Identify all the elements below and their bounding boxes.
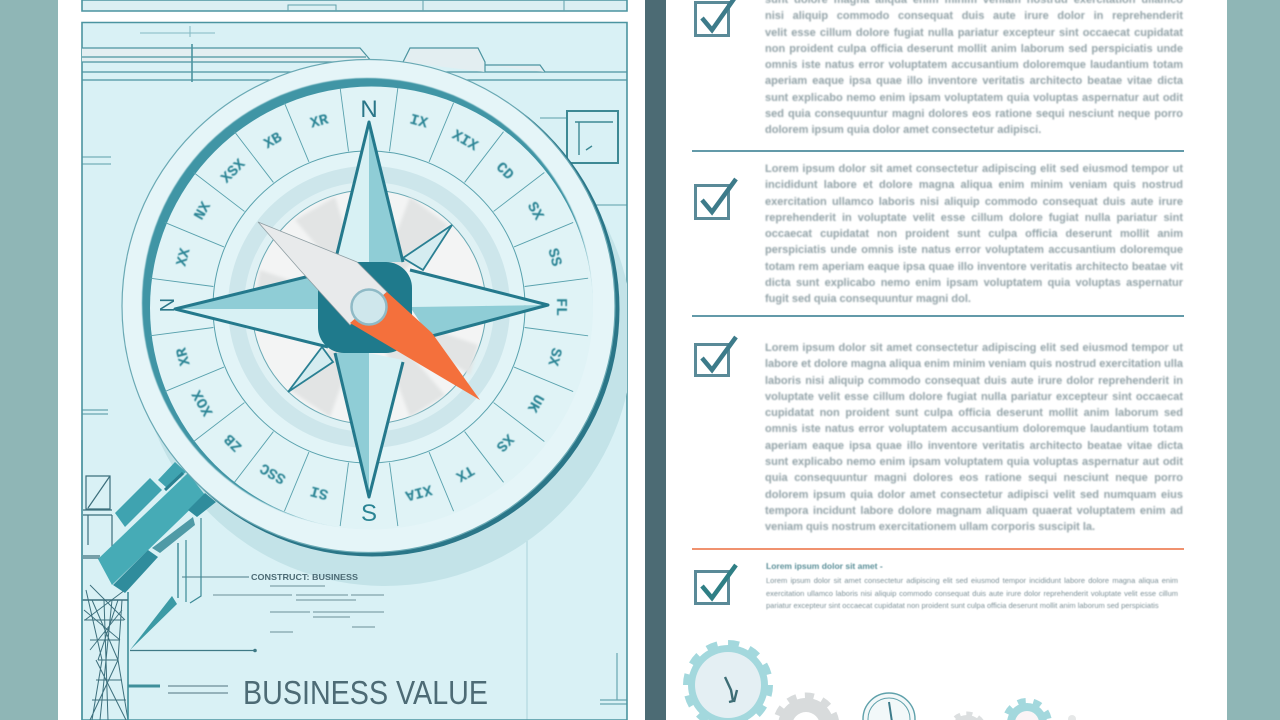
- dial sector lines: [150, 88, 588, 526]
- dial graduations: SSC: [257, 459, 289, 487]
- dial graduations: XSX: [218, 156, 249, 187]
- compass body: [122, 60, 620, 556]
- dial graduations: SS: [543, 247, 565, 268]
- cardinal letter west: N: [157, 298, 179, 312]
- dark centre spine: [645, 0, 666, 720]
- item 3: text: laboris nisi aliquip commodo consequat duis aute irure dolor reprehenderit in: [765, 375, 1183, 387]
- dial face: [150, 86, 593, 530]
- item 1: text: dolorem ipsum quia dolor amet consectetur adipisci.: [765, 124, 1041, 136]
- panel: right sheet: [666, 0, 1227, 720]
- dial graduations: XX: [173, 247, 195, 268]
- illustration: compass blueprint: [81, 0, 628, 720]
- item 1: text: [764, 0, 1184, 136]
- compass drop shadow: [155, 220, 627, 586]
- dial graduations: XIX: [449, 127, 481, 155]
- small compass dial: [863, 693, 915, 720]
- blueprint background lines: [82, 26, 627, 720]
- divider rule 2: [692, 315, 1184, 317]
- item 3: text: veniam quis nostrum exercitationem ullam corporis suscipit la.: [765, 521, 1095, 533]
- item 4: sub-heading: Lorem ipsum dolor sit amet -: [766, 561, 883, 571]
- item 3: text: aperiam eaque ipsa quae illo inventore veritatis architecto beatae vitae dicta: [765, 440, 1183, 452]
- dial graduations: XB: [261, 129, 285, 153]
- callout label: blueprint note: [130, 518, 384, 652]
- item 1: checkbox: [694, 0, 736, 37]
- white bezel: [122, 60, 615, 552]
- gear: large teal: [686, 644, 770, 720]
- item 2: checkbox: [694, 178, 738, 220]
- dial graduations: XR: [173, 346, 195, 367]
- dial graduations: ZB: [221, 430, 246, 455]
- item 3: text: [764, 342, 1184, 534]
- blueprint panel: [82, 22, 627, 720]
- dial graduations: SI: [309, 481, 330, 503]
- dial graduations: UK: [523, 391, 547, 415]
- item 3: text: voluptate velit esse cillum dolore fugiat nulla pariatur excepteur sint occaecat: [765, 391, 1183, 403]
- needle pivot: [352, 290, 386, 324]
- callout label: blueprint note: CONSTRUCT: BUSINESS: [251, 572, 358, 582]
- gear: small teal: [1005, 701, 1049, 720]
- needle white half: [258, 222, 387, 325]
- dial graduations: SX: [523, 199, 547, 223]
- item 4: checkbox: [694, 564, 738, 605]
- divider rule orange: [692, 548, 1184, 550]
- item 1: text: non proident culpa officia deserunt mollit anim laborum sed perspiciatis unde: [765, 43, 1183, 55]
- gear: small grey: [949, 714, 985, 720]
- compass star secondary points: [288, 225, 452, 392]
- outer dark rim: [124, 62, 620, 556]
- top blueprint strip: [82, 0, 627, 11]
- item 2: text: totam rem aperiam eaque ipsa quae illo inventore veritatis architecto beatae vit: [765, 261, 1183, 273]
- cardinal letter south: S: [361, 500, 377, 527]
- blueprint box top right: [567, 111, 618, 163]
- item 2: text: Lorem ipsum dolor sit amet consectetur adipiscing elit sed eiusmod tempor ut: [765, 163, 1183, 175]
- star centre hub: [318, 262, 412, 353]
- dial graduations: CD: [492, 159, 517, 184]
- item 3: text: Lorem ipsum dolor sit amet consectetur adipiscing elit sed eiusmod tempor ut: [765, 342, 1183, 354]
- item 2: text: reprehenderit in voluptate velit esse cillum dolore fugiat nulla pariatur sint: [765, 212, 1183, 224]
- item 4: text: [766, 576, 1178, 610]
- dial graduations: NX: [191, 199, 215, 223]
- dial graduations: XR: [309, 111, 330, 133]
- dial graduations: XS: [492, 430, 517, 455]
- magnifier handle: [98, 462, 216, 593]
- cardinal letter north: N: [360, 96, 378, 123]
- item 1: text: velit esse cillum dolore fugiat nulla pariatur excepteur sint occaecat cupidatat: [765, 27, 1183, 39]
- dial graduations: XOX: [189, 387, 217, 419]
- dial graduations: IX: [408, 111, 429, 133]
- item 4: text: pariatur excepteur sint occaecat cupidatat non proident sunt culpa officia deserunt mollit anim laborum sed perspiciatis: [766, 601, 1159, 610]
- dial graduations: XIA: [403, 480, 434, 504]
- divider rule 1: [692, 150, 1184, 152]
- tower lattice: [82, 440, 160, 720]
- dial graduations: [173, 111, 569, 504]
- item 1: text: aperiam eaque ipsa quae illo inventore veritatis architecto beatae vitae dicta: [765, 75, 1183, 87]
- item 3: checkbox: [694, 336, 738, 377]
- gear: grey: [776, 696, 836, 720]
- gear dot: [1068, 715, 1076, 720]
- needle orange half: [350, 292, 480, 400]
- heading: business value: [168, 674, 488, 711]
- dial graduations: TX: [453, 461, 477, 485]
- inner dark crescent: [142, 78, 592, 528]
- dial graduations: FL: [552, 298, 569, 316]
- panel: left sheet: [58, 0, 645, 720]
- heading: business value: BUSINESS VALUE: [243, 674, 488, 711]
- item 2: text: fugit sed quia consequuntur magni dol.: [765, 293, 971, 305]
- gears row: [683, 640, 1076, 720]
- dial rings: [213, 151, 525, 463]
- inner petals: [254, 197, 478, 417]
- dial graduations: SX: [543, 346, 565, 367]
- item 3: text: labore et dolore magna aliqua enim minim veniam quis nostrud exercitation ulla: [765, 358, 1183, 370]
- item 2: text: [764, 163, 1184, 306]
- compass star main points: [175, 122, 548, 497]
